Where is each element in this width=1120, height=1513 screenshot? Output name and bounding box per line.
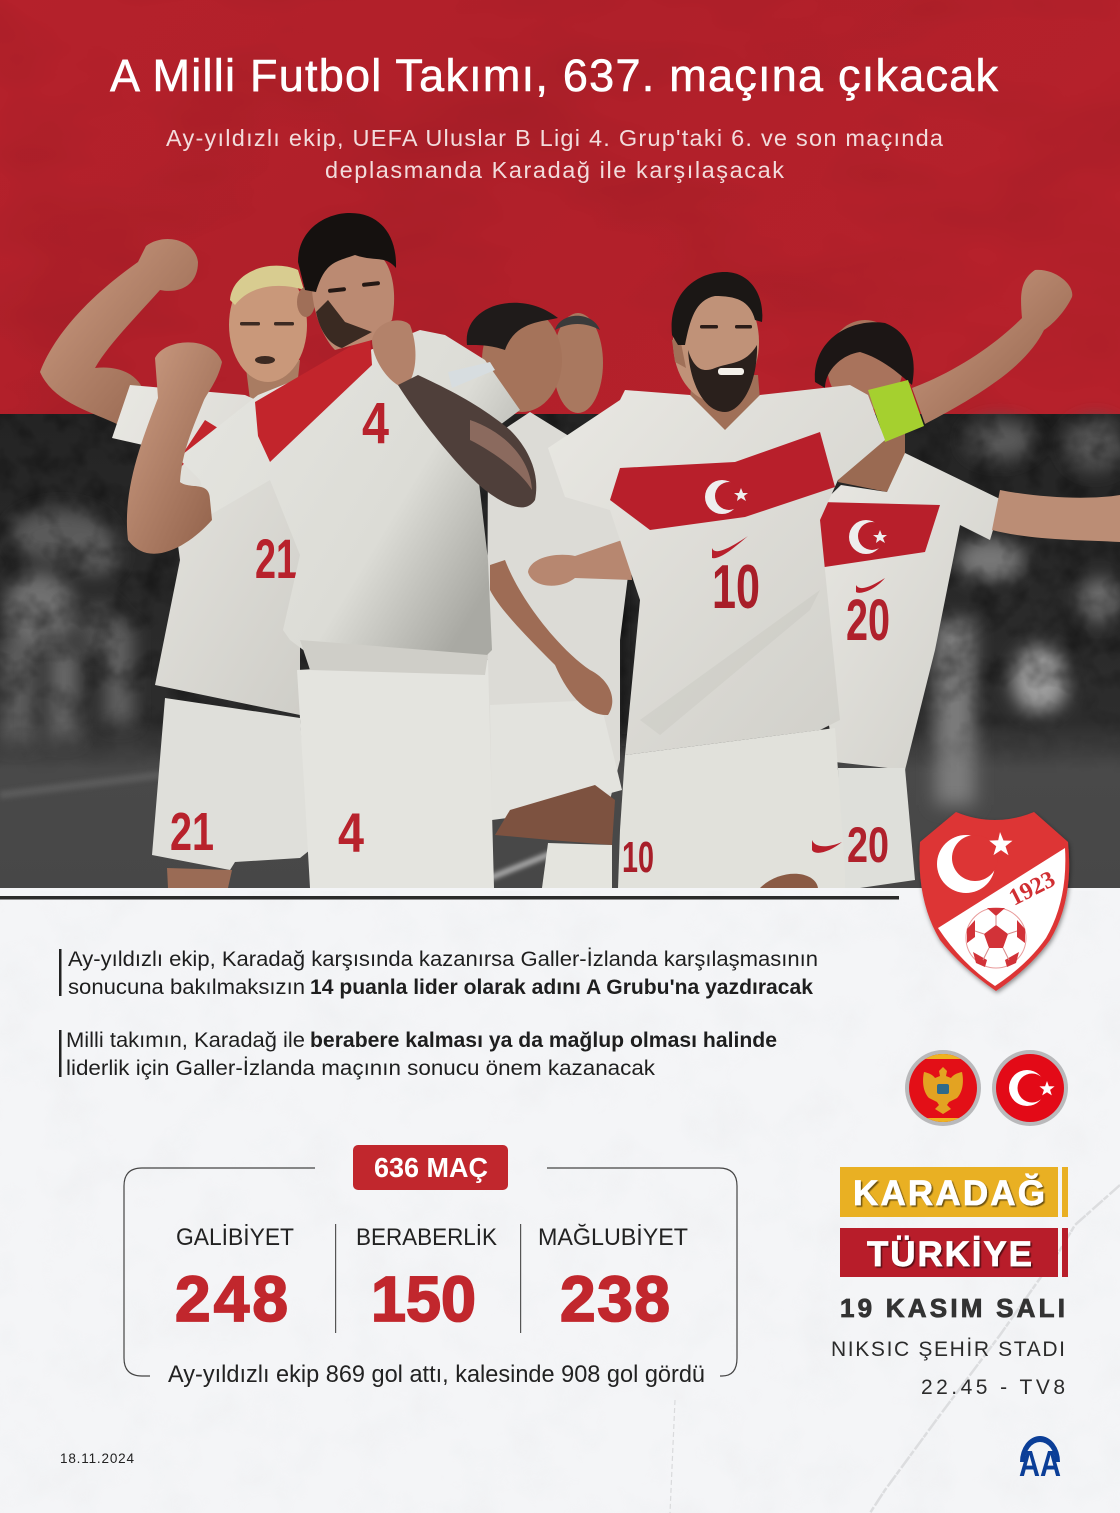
neck 20 <box>838 430 905 492</box>
match card: Türkiye <box>840 1228 1068 1277</box>
leg 21 <box>167 868 232 888</box>
stat: mağlubiyet: 238 <box>560 1263 670 1335</box>
swoosh 10 <box>712 536 748 558</box>
paper texture cracks <box>670 1185 1120 1513</box>
red band texture <box>0 0 1120 414</box>
time and channel: 22.45 - TV8 <box>921 1376 1065 1399</box>
head 4 <box>312 248 394 350</box>
red collar band <box>255 335 372 462</box>
stat: beraberlik: BERABERLİK <box>356 1224 497 1251</box>
crescent <box>1009 1070 1046 1106</box>
hem 4 <box>300 640 488 675</box>
text block 1: sonucuna bakılmaksızın <box>68 976 305 999</box>
number 10: 10 <box>712 553 760 622</box>
dividers <box>335 1224 521 1333</box>
forward head <box>482 308 562 412</box>
match card: Karadağ: KARADAĞ <box>853 1173 1045 1213</box>
forearm shade <box>470 420 532 490</box>
hair 10 <box>672 272 762 345</box>
badge: 636 MAÇ: 636 MAÇ <box>374 1152 488 1183</box>
neck 10 <box>690 375 760 432</box>
hair 20 <box>815 322 914 388</box>
red header band <box>0 0 1120 414</box>
sleeve patch <box>448 362 495 388</box>
pitch lines <box>0 775 560 878</box>
text block 2: berabere kalması ya da mağlup olması halinde <box>310 1029 777 1052</box>
player behind head <box>553 313 603 413</box>
number 4 shirt: 4 <box>362 391 389 456</box>
head 10 <box>673 282 759 402</box>
crest 10 <box>705 480 748 514</box>
back player forearm <box>490 560 612 715</box>
shorts 4 <box>297 660 494 888</box>
shirt back player <box>487 412 640 820</box>
stripe piece 21 <box>172 420 218 470</box>
crescent 20 <box>849 520 887 554</box>
shorts number 10: 10 <box>622 833 654 882</box>
stadium: NIKSIC ŞEHİR STADI <box>831 1338 1065 1361</box>
text block 2: liderlik için Galler-İzlanda maçının sonucu önem kazanacak <box>66 1057 656 1080</box>
hair 4 <box>298 213 396 292</box>
eagle <box>923 1067 963 1114</box>
sock <box>542 843 612 888</box>
ear 4 <box>297 287 315 317</box>
stat: galibiyet <box>175 1224 294 1335</box>
teeth 10 <box>718 368 744 375</box>
badge: 636 MAÇ <box>353 1145 508 1190</box>
text block 1: 14 puanla lider olarak adını A Grubu'na yazdıracak <box>310 976 813 999</box>
date: 18.11.2024 <box>60 1451 134 1466</box>
number 21 on shorts: 21 <box>170 802 214 862</box>
knee 10 <box>760 874 818 888</box>
crowd mottling <box>0 414 1120 774</box>
forward hair <box>467 303 558 350</box>
shorts back player <box>490 700 622 820</box>
player 21 <box>40 239 310 888</box>
stat: beraberlik: 150 <box>371 1263 476 1335</box>
eagle shield <box>937 1084 949 1094</box>
head 20 <box>827 320 903 410</box>
match date: 19 KASIM SALI <box>840 1293 1065 1323</box>
leg back player <box>495 785 615 845</box>
player 10 <box>548 270 1072 888</box>
hand at shirt <box>372 320 415 388</box>
stripe 20 <box>818 502 940 568</box>
shorts swoosh <box>812 840 842 853</box>
title: A Milli Futbol Takımı, 637. maçına çıkacak <box>110 50 998 101</box>
text block 1: Ay-yıldızlı ekip, Karadağ karşısında kazanırsa Galler-İzlanda karşılaşmasının <box>68 948 818 971</box>
text block 2 <box>59 1029 777 1080</box>
arm 20 <box>992 490 1120 542</box>
shirt 20 <box>815 453 1002 770</box>
shorts 21 <box>152 698 310 870</box>
football <box>966 908 1026 968</box>
shield white part <box>938 848 1065 986</box>
paper background <box>0 888 1120 1513</box>
shorts 10 <box>618 728 845 888</box>
captain armband <box>868 380 924 442</box>
stat: beraberlik <box>356 1224 497 1335</box>
shirt fold <box>640 590 820 735</box>
subtitle: deplasmanda Karadağ ile karşılaşacak <box>325 157 784 183</box>
stripe 10 <box>610 432 835 530</box>
subtitle <box>166 125 944 183</box>
raised arm 21 <box>40 239 198 428</box>
text block 1 <box>59 948 818 999</box>
shorts number 4: 4 <box>338 801 364 864</box>
star <box>1039 1081 1055 1095</box>
eyes 10 <box>700 325 752 328</box>
tattooed forearm <box>398 375 536 507</box>
beard 4 <box>316 300 372 348</box>
player behind hair <box>555 316 600 330</box>
crest: TFF shield <box>919 812 1069 991</box>
blond hair 21 <box>230 266 304 305</box>
shirt 21 <box>112 385 300 715</box>
stat: mağlubiyet <box>538 1224 688 1335</box>
dark rule <box>0 896 899 900</box>
match card: Türkiye: TÜRKİYE <box>867 1235 1032 1274</box>
flag: Türkiye <box>992 1050 1068 1126</box>
flag: Montenegro <box>905 1050 981 1126</box>
raised arm 4 <box>127 342 222 554</box>
1923: 1923 <box>1005 866 1059 911</box>
shirt 10 <box>548 385 885 755</box>
head 21 <box>229 268 307 382</box>
grayscale stadium background <box>0 414 1120 888</box>
shield red <box>919 812 1069 991</box>
crescent <box>937 835 998 893</box>
reaching arm <box>528 538 632 586</box>
stat: mağlubiyet: MAĞLUBİYET <box>538 1224 688 1251</box>
subtitle: Ay-yıldızlı ekip, UEFA Uluslar B Ligi 4. Grup'taki 6. ve son maçında <box>166 125 944 151</box>
beard 10 <box>688 345 757 412</box>
number 20: 20 <box>846 588 890 653</box>
paper texture <box>0 888 1120 1513</box>
goals note: Ay-yıldızlı ekip 869 gol attı, kalesinde 908 gol gördü <box>168 1361 705 1388</box>
neck 21 <box>245 360 300 405</box>
ears 10 <box>672 338 686 368</box>
shorts 20 <box>838 768 915 888</box>
match card: Karadağ <box>840 1167 1068 1217</box>
shirt 4 <box>178 330 520 672</box>
AA logo: AA <box>1019 1443 1061 1484</box>
stats panel <box>124 1145 737 1388</box>
shorts number 20: 20 <box>847 817 889 873</box>
number 21 on shirt: 21 <box>255 527 297 590</box>
text block 2: Milli takımın, Karadağ ile <box>66 1029 305 1052</box>
raised arm 10 <box>912 270 1072 424</box>
swoosh 20 <box>856 578 885 593</box>
player 4 <box>127 213 536 888</box>
star <box>989 832 1012 855</box>
player 20 <box>815 320 1120 888</box>
background players <box>467 303 640 888</box>
panel frame <box>124 1168 737 1376</box>
blurred crowd shapes <box>0 419 1120 805</box>
photo base rule <box>0 888 1120 891</box>
face 21 <box>240 322 294 364</box>
eyes 4 <box>328 281 380 293</box>
stat: galibiyet: GALİBİYET <box>176 1224 294 1251</box>
stat: galibiyet: 248 <box>175 1263 288 1335</box>
